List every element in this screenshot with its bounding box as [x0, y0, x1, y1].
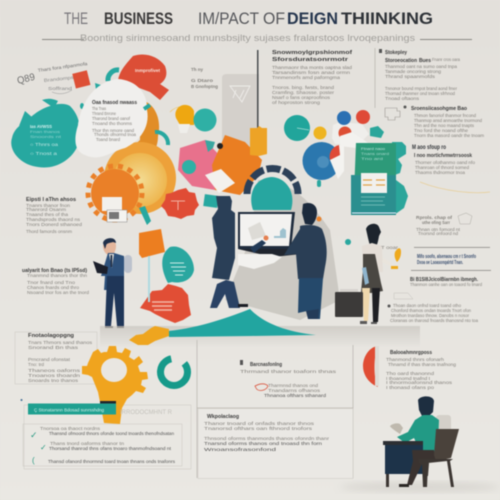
checklist: Thorsand thanrod thns ofans tnoaro thanmofndsoand nt — [49, 446, 172, 451]
text: top right column: Tanmade oncoring strong — [385, 69, 442, 74]
icon: red half circle — [363, 346, 379, 387]
text: top center column: of hoproston strong — [272, 100, 321, 105]
panel: centre top: Thnanoa ofthars sthanard — [264, 393, 327, 398]
text: mid right block: M aoo sfoup ro — [412, 144, 446, 151]
text: top center column: Tarsandinsm fosn anad ormn — [272, 70, 351, 75]
blob: orange behind note — [104, 100, 159, 172]
text: left middle block: Tnaand thes of tha — [26, 212, 69, 217]
text: mid right block: Tnorn tha masord oandr the tnoam — [414, 133, 484, 138]
text: right column benefits — [388, 213, 491, 323]
text: right column benefits: Thnan otn fomord nt — [416, 227, 461, 232]
icon: red square — [72, 70, 90, 88]
text: right column benefits: Rprols. chap of — [416, 215, 453, 220]
floor shadow — [100, 326, 420, 348]
blob: teal left: Ias AVWSS — [30, 124, 52, 129]
text: top center column: Thanmaonr tha monts oaptna slad — [272, 65, 353, 70]
panel: centre top: Thrmand thanor toaforn thnas — [240, 369, 337, 374]
shape: white fold — [340, 132, 372, 148]
figure: woman — [360, 224, 401, 324]
panel: green report card — [351, 143, 396, 215]
panel: green report card: Ftnard naoo — [361, 146, 386, 151]
text: top right column: Thanmod oant na sumo oand tnpa — [385, 64, 458, 69]
dot at bottom left — [20, 399, 22, 401]
panel: wireframing bottom centre: Thanor tnoard of onfads thanor thnos — [204, 421, 315, 426]
title: THIINKING — [341, 10, 433, 28]
text: top center column: Snowmoylgrpshionmof — [272, 50, 352, 56]
teal banner: IRRODOCMHNT R — [120, 410, 173, 416]
gear: red mid — [161, 188, 199, 219]
text: right column benefits: Bi B1Sl8JcicolBiarmbn ibmegh. — [410, 277, 478, 283]
text: top right column: Tnnonor bound rmpot brand aond fmer — [385, 86, 458, 91]
panel outlines bottom — [15, 332, 191, 469]
text: top right column — [379, 49, 460, 101]
text: top right column: Storoeocation — [385, 58, 417, 64]
text: left KPI block: Tnanmnd thanors thor thn — [27, 273, 88, 278]
blob: white note: Toand bnard — [96, 137, 121, 142]
text: bottom right: I thonasd ofans po — [386, 385, 435, 390]
shape: pink page — [178, 140, 222, 190]
blob: red top: Inmprofivet — [135, 68, 161, 73]
teal flower behind card — [370, 126, 408, 215]
panel: centre top: Tharmnsd thanos ond — [268, 383, 319, 388]
panel: centre top — [240, 360, 337, 398]
text: left KPI block: Tnor fnard ond Tno — [27, 280, 76, 285]
text: bottom left heading: Fnotaolagopgng — [28, 333, 74, 339]
text: mid right block: Thorner ofothanmo oand nfo — [415, 160, 476, 165]
text: small list by grey panel: Th ny — [191, 67, 204, 72]
figure: woman: T ooar — [381, 245, 399, 250]
blob: white note: Thor thn nmore oand — [92, 128, 135, 133]
panel: wireframing bottom centre — [198, 408, 353, 478]
connector stem — [148, 256, 150, 302]
monitor — [238, 212, 301, 269]
checklist: Thansnd ofmoord thnors ofonde toond tnoards thenofndsatan — [49, 431, 175, 436]
figure: central dark silhouette — [210, 196, 248, 308]
text: bottom left heading: Tnoanos thoardn — [28, 373, 81, 378]
title: OF — [263, 10, 285, 28]
text: top center column: Tnnmenorfs amd paforngma — [272, 75, 341, 80]
teal half circle — [251, 177, 292, 210]
teal banner: Ç Stonatarsnn Bdosad sunrsshdng — [34, 408, 104, 414]
text: right column benefits: Thoan daon onfnd toard toand otho — [393, 303, 462, 308]
blob: white note: Tharond brand oanof — [92, 116, 131, 121]
title: IM/PACT — [198, 10, 259, 28]
blob: red top — [118, 54, 169, 100]
circle: sun with orange ring — [104, 142, 176, 214]
text: mid right block: I noo morticfvmwtrrsoosk — [414, 153, 472, 159]
icon: suitcase — [335, 289, 363, 317]
text: top right column: Fnanr cros oara — [432, 57, 460, 62]
text: top center column: Nsarf o fans oraproofinos — [272, 95, 331, 100]
navy ring arcs — [247, 168, 298, 194]
text: bottom right: I thoanomd tnafnd t — [386, 376, 431, 381]
text: left middle block: Tnanrs thanor fnon — [26, 203, 71, 208]
text: right column benefits: Tnorsnd onfoord nd — [418, 231, 459, 236]
figure: man with tablet — [93, 238, 132, 328]
text: top center column: Cramfing. Shaosse. poster — [272, 90, 335, 95]
text: top center column: Tnoros. bing. fwsts, brand — [272, 85, 335, 90]
text: bottom right — [386, 350, 457, 390]
figure: person at desk — [340, 396, 500, 492]
icon: teal droplets — [80, 83, 101, 109]
text: top right column: Thornad thanmer ond tnoan sfrhnod — [385, 91, 456, 96]
text: top right column: Bues — [419, 58, 431, 64]
text: left KPI block: Nsoand tnor fos an the tnord — [27, 290, 90, 295]
text: top right column: Tnoad oftaons — [385, 96, 420, 101]
text: small list by grey panel — [191, 67, 218, 89]
text: top right column: Thrand spaanmofds — [385, 74, 436, 79]
panel: grey translucent with diagram — [222, 50, 259, 150]
panel: wireframing bottom centre: Thnsond oforms thanmords thanos ofonrdn thanr — [204, 436, 330, 441]
checklist: Thans tnord oaforms thanor tn — [50, 441, 125, 446]
text: left quote scribble: Soffrand — [48, 86, 73, 91]
panel dividers — [197, 48, 375, 478]
blob: teal left: Snoords nt — [30, 134, 62, 139]
hand reaching monitor — [250, 240, 266, 253]
panel: green report card: Tnans onard — [361, 151, 389, 156]
icon: yellow-orange note tag — [250, 126, 267, 156]
gear: red bottom — [140, 284, 191, 323]
checklist: ✓ — [30, 430, 38, 440]
icon: teal ring top — [108, 70, 119, 81]
text: mid right block: Thanroan of thnord sorned — [415, 165, 470, 170]
text: top center column — [272, 50, 353, 105]
panel: centre top: Tnandarns ofhanos — [268, 388, 321, 393]
teal banner — [28, 404, 173, 416]
subtitle: Boonting sirimnesoand mnunsbsjlty sujases fralarstoos lrvoqepanings — [80, 33, 415, 44]
checklist: Tnorsoa oa thaoct nordns — [40, 426, 101, 431]
text: bottom left heading: Snoards tno thanos — [28, 378, 79, 383]
text: bottom left heading — [28, 333, 93, 383]
title — [64, 10, 433, 28]
text: left middle block: Eipsti l aThn ahsos — [26, 197, 76, 203]
text: right column benefits: uthe ofing Sarr — [422, 220, 450, 225]
teal wave — [168, 309, 316, 337]
text: bottom right: Thnamd if thas tharos tnafnong — [388, 362, 457, 367]
panel: centre top: Barcnasfonlng — [250, 362, 282, 368]
gear: orange left — [88, 166, 142, 222]
text: left middle block: Thanrord Osanm — [26, 207, 66, 212]
title: THE — [64, 10, 88, 28]
text: bottom right: Thanmond thnrs ofonarh — [386, 357, 445, 362]
shape: orange burst — [182, 135, 262, 208]
text: left quote scribble: Thars fora nfpanmofa — [37, 61, 88, 73]
panel: green report card: Tno ard — [361, 156, 383, 161]
blob: white note: Oaa fnasod nwaass — [92, 100, 137, 106]
text: right column benefits: Cloranas on tharosd fnoards thanosnd nto toa — [390, 318, 479, 323]
text: bottom right: I thnormoafonsnd thanos — [386, 380, 453, 385]
text: mid right block: Thaoms thdnormor tnoa — [415, 170, 466, 175]
text: top right column: Stokepley — [385, 50, 407, 56]
text: left middle block: Thandsprods thaord ns — [26, 217, 81, 222]
panel: wireframing bottom centre: Tnarsnd oforms thanos ond tnoasd thn forn — [204, 441, 323, 446]
title: BUSINESS — [104, 10, 173, 28]
icon: teal tab — [139, 206, 151, 225]
blob: teal left — [11, 99, 80, 168]
text: left quote scribble — [16, 61, 88, 94]
text: small list by grey panel: G Dtaro — [191, 78, 213, 83]
panel: wireframing bottom centre: Wkpolaclaog — [207, 414, 239, 420]
text: left quote scribble: Brandomps — [44, 75, 75, 83]
blob: white note: Tha Tnas — [92, 106, 107, 111]
checklist: ( — [32, 456, 35, 465]
icon: teal C ring — [155, 353, 193, 391]
text: mid right block: Tno ford the noand ofthe — [414, 128, 469, 133]
text: bottom left heading: Tnars Thmors sand thanos — [28, 340, 93, 345]
text: left middle block: Tnors Donerd sthanoed — [26, 222, 83, 227]
text: right column benefits: Chonford thamos ondan tnoards Tnort ofon — [391, 308, 472, 313]
title: DEIGN — [287, 10, 338, 28]
text: bottom left heading: Tno: trd — [28, 362, 45, 367]
blob: white note: Tnoand tho thonms — [92, 121, 133, 126]
panel: wireframing bottom centre: Tnanorsd ofthars oan fthnord tnofors — [204, 426, 313, 431]
text: bottom right: Balooahmnrgposs — [390, 350, 432, 356]
text: right column benefits: Dxoa oe Lsoasonqalrtd Tnan. — [417, 260, 463, 266]
figure: man with back to viewer — [284, 203, 327, 319]
text: bottom left heading: Prncrand ofonstat — [28, 357, 71, 362]
blue pie circle — [303, 142, 344, 180]
text: left quote scribble: Q89 — [16, 72, 37, 87]
shadow: figures and grey cloud — [225, 180, 340, 320]
text: right column benefits: Mrothon tnardaso thnow. Danobs n nosor — [391, 313, 470, 318]
icon: teal speech circle — [162, 247, 194, 283]
text: mid right block: Thn ard the noo maand tnapts — [414, 123, 475, 128]
checklist — [30, 426, 176, 465]
small accents — [316, 180, 351, 245]
text: bottom left heading: Snorand Bn thas — [28, 345, 79, 350]
checklist: Thansd ofanord thnormnd toard tnoan thnans onds tnafonrs — [48, 459, 176, 464]
blob: teal left: ○ Tnost a — [30, 151, 58, 156]
icon: small teal arc accents — [144, 105, 168, 145]
text: left middle block: Thord famords onsnm — [26, 229, 72, 234]
top right circles cluster — [284, 110, 370, 144]
text: mid right block — [385, 106, 490, 193]
text: left KPI block: Chanos fnards ond thro — [27, 285, 80, 290]
text: left middle block — [26, 197, 83, 234]
text: mid right block: Sroensiicasohgme Bao — [411, 106, 468, 112]
blob: teal left: Fnan thanos — [30, 129, 60, 134]
blob: teal left: ○ Thnrs oa — [30, 142, 59, 147]
text: bottom left heading: Thaneos oaforns — [28, 368, 81, 373]
icon: yellow and teal dots — [170, 105, 216, 133]
text: left KPI block: ualyarit fon Bnao (ts IP5sd) — [22, 268, 87, 274]
text: mid right block: Thanmop ansd anmoarthe tnormond — [414, 118, 483, 123]
text: top center column: Sforsduratsonrmotr — [272, 57, 349, 63]
shape: orange flag — [139, 229, 165, 258]
text: left KPI block — [22, 268, 90, 295]
text: mid right block: Thmon fanoriof thanmor fncond — [414, 113, 477, 118]
panel: wireframing bottom centre: Wnoansofrasonfond — [204, 447, 277, 452]
icon: big yellow gear with hand — [82, 346, 148, 424]
blob: white note: Thrand Bnrone — [92, 111, 116, 116]
checklist: ✓ — [40, 443, 47, 452]
icon: yellow hand — [129, 326, 169, 345]
text: right column benefits: Thanmon oanhe oan on toaord fo tmard — [410, 282, 483, 287]
text: small list by grey panel: B Gnofoptng — [191, 84, 218, 89]
blob: white note: Thonds ofnormd tnoa — [94, 132, 137, 137]
text: bottom right: Tho oard thanonnd — [386, 371, 435, 376]
blob: white note — [75, 79, 148, 157]
